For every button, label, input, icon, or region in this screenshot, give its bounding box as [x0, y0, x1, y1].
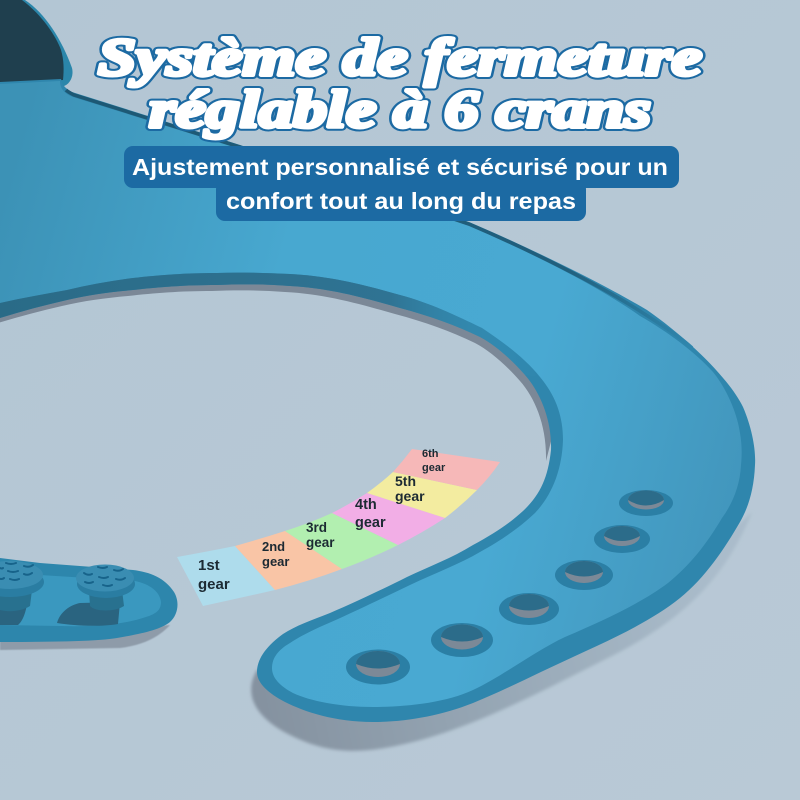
3rd gear band: [285, 513, 398, 569]
subtitle: Ajustement personnalisé et sécurisé pour un: [132, 154, 668, 180]
strap rim: [0, 558, 177, 642]
adjustment holes: [346, 490, 673, 684]
6th gear band: gear: [422, 462, 446, 474]
left button: [0, 561, 44, 611]
flat face: [0, 81, 742, 707]
5th gear band: [367, 472, 477, 518]
title: [98, 29, 702, 139]
2nd gear band: gear: [262, 554, 289, 569]
right button: [76, 564, 135, 610]
2nd gear band: 2nd: [262, 539, 285, 554]
neck rim dark band: [0, 273, 540, 377]
upper fold dark panel: [0, 0, 73, 90]
6th gear band: 6th: [422, 448, 439, 460]
4th gear band: [332, 493, 445, 545]
6th gear band: [393, 448, 500, 490]
hole 5: [594, 525, 650, 553]
title: réglable à 6 crans: [149, 81, 651, 139]
5th gear band: gear: [395, 488, 425, 504]
5th gear band: 5th: [395, 473, 416, 489]
subtitle: [124, 146, 679, 221]
subtitle: confort tout au long du repas: [226, 188, 576, 214]
4th gear band: gear: [355, 515, 386, 531]
hole 2: [431, 623, 493, 657]
1st gear band: gear: [198, 576, 230, 593]
title: Système de fermeture: [98, 29, 702, 87]
top edge dark line: [66, 90, 692, 348]
4th gear band: 4th: [355, 497, 377, 513]
hole 3: [499, 593, 559, 625]
title: réglable à 6 crans: [149, 81, 651, 139]
left strap with buttons: [0, 558, 177, 650]
outer rim: [0, 79, 755, 722]
1st gear band: [177, 546, 275, 606]
hole 4: [555, 560, 613, 590]
3rd gear band: 3rd: [306, 520, 327, 535]
2nd gear band: [235, 531, 342, 590]
1st gear band: 1st: [198, 557, 220, 574]
strap floor: [0, 574, 161, 626]
gear scale: [177, 448, 500, 606]
hole 1: [346, 650, 410, 684]
3rd gear band: gear: [306, 535, 335, 550]
neck opening inner shadow: [0, 276, 560, 461]
tab cast shadow: [251, 512, 752, 751]
hole 6: [619, 490, 673, 516]
strap shadow: [0, 625, 170, 650]
title: Système de fermeture: [98, 29, 702, 87]
button shadows: [0, 600, 120, 626]
